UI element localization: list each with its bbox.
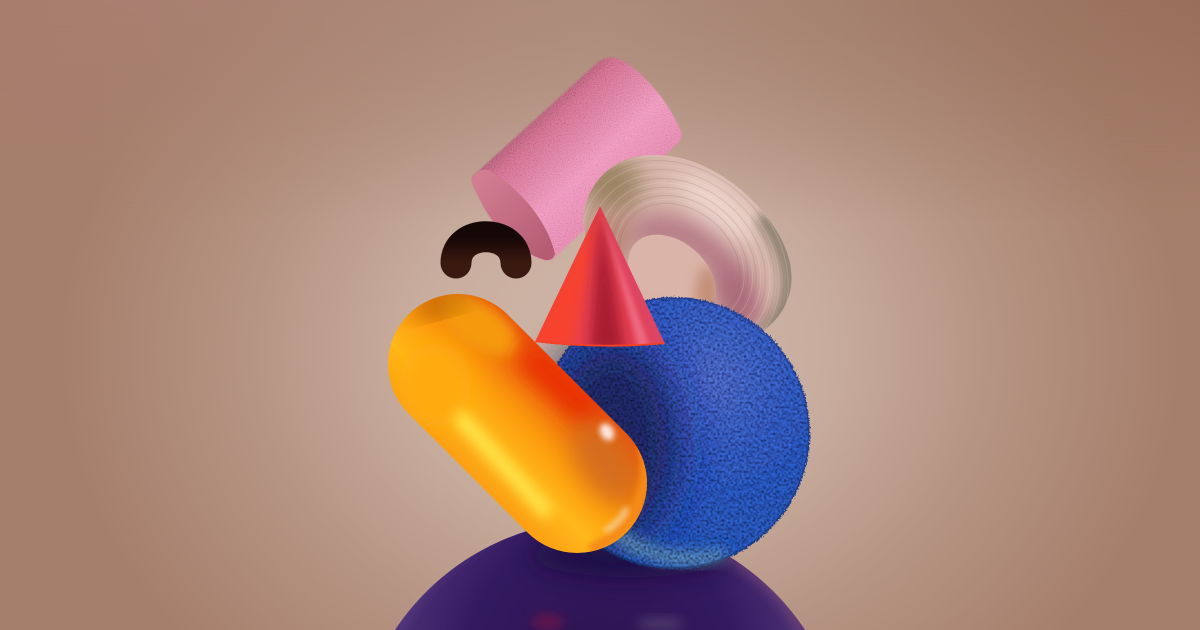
left rim glow <box>396 588 430 628</box>
olive upper-left shading <box>582 156 642 216</box>
left golden glow <box>399 343 471 427</box>
top-left dark patch <box>409 290 471 320</box>
dark shaded left side <box>542 335 682 545</box>
right edge <box>612 234 665 345</box>
bright left facet <box>535 215 598 346</box>
dark central wedge <box>590 206 625 352</box>
grey reflection <box>636 618 684 630</box>
brown lower-left shading <box>584 210 636 270</box>
yellow highlight streak <box>462 420 545 510</box>
glossy highlight <box>597 421 617 443</box>
purple sphere <box>395 531 805 630</box>
lower reflection <box>607 510 626 530</box>
orange right rim <box>590 445 646 550</box>
mauve lower-right shading <box>711 261 759 335</box>
lower-right burnt end <box>566 414 638 511</box>
dark arch <box>456 237 516 263</box>
visible inner wall of the hole <box>628 234 716 303</box>
upper orange end <box>438 294 523 360</box>
base rim <box>535 343 665 346</box>
sphere shadow <box>530 533 730 577</box>
olive right edge <box>762 215 791 335</box>
orange capsule <box>388 294 647 553</box>
blue fuzzy sphere <box>538 297 810 569</box>
cylinder end face <box>472 170 555 260</box>
red shadow band <box>525 352 595 418</box>
pink cylinder <box>472 58 682 260</box>
red cone <box>535 206 665 347</box>
right rim glow <box>724 556 804 630</box>
red reflection <box>532 615 564 629</box>
wooden torus <box>583 154 792 330</box>
light upper-right surface <box>673 167 760 249</box>
wood grain rings <box>583 156 789 330</box>
pink inner shading <box>635 229 748 325</box>
muted lower rim <box>612 530 725 559</box>
pink highlight wedge <box>603 222 651 346</box>
